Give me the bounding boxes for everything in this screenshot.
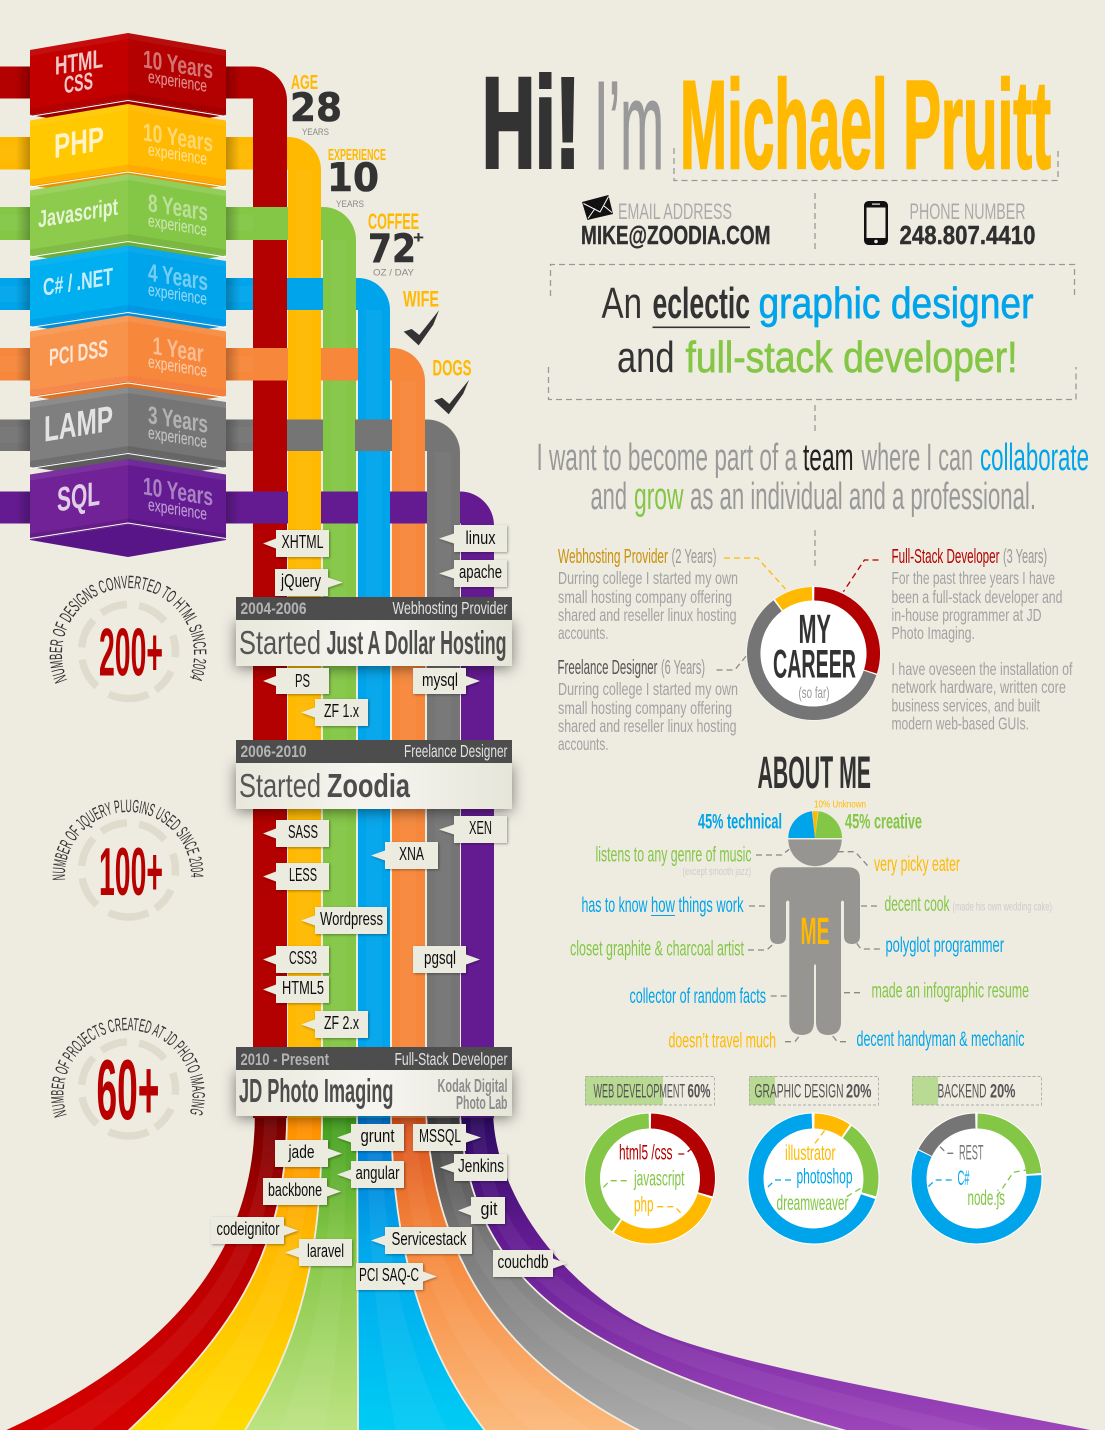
about me annotations: collector of random facts (630, 985, 766, 1008)
about me annotations: doesn’t travel much (668, 1030, 776, 1052)
tag: Jenkins (440, 1154, 507, 1181)
career: freelance designer (558, 655, 747, 754)
skill bar: web development (585, 1076, 714, 1105)
donut: graphic design (748, 1112, 880, 1244)
career: webhosting provider: shared and reseller linux hosting (558, 605, 736, 625)
contact: email (581, 195, 770, 250)
objective statement (536, 437, 1089, 518)
tag: XNA (371, 842, 438, 869)
career: full-stack developer: Photo Imaging. (892, 623, 975, 643)
contact: phone (864, 199, 1036, 250)
rainbow fan of skill bands (0, 1115, 1105, 1430)
objective statement: I want to become part of a (536, 437, 798, 479)
contact: phone: PHONE NUMBER (910, 199, 1026, 224)
timeline panel: 2004-2006: Just A Dollar Hosting (326, 624, 506, 661)
about me annotations: decent cook (884, 893, 950, 916)
tag: CSS3: CSS3 (289, 948, 317, 968)
title: Hi! (482, 52, 580, 195)
skill bar: graphic design: GRAPHIC DESIGN (754, 1082, 844, 1102)
stat: coffee (368, 209, 424, 278)
tag: PS (263, 668, 329, 694)
career: webhosting provider: Webhosting Provider (558, 546, 668, 568)
tag: codeignitor: codeignitor (216, 1219, 280, 1239)
person figure with pie head (770, 811, 860, 1035)
tag: pgsql (413, 946, 480, 973)
donut: graphic design: dreamweaver (776, 1192, 848, 1215)
donut: web development: php (634, 1194, 654, 1216)
stat: age (290, 72, 342, 138)
skill block: C# / .NET: 4 Years (148, 259, 208, 296)
tag: apache (439, 560, 507, 587)
tag: git: git (480, 1199, 498, 1219)
donut: web development: html5 /css (619, 1142, 672, 1164)
tag: backbone: backbone (268, 1180, 322, 1200)
career: freelance designer: small hosting company offering (558, 698, 732, 718)
timeline panel: 2010-present: Photo Lab (456, 1093, 508, 1113)
stat: experience: EXPERIENCE (328, 147, 386, 164)
donut: backend (910, 1112, 1042, 1244)
skill block: PCI DSS: PCI DSS (49, 335, 108, 372)
tag: HTML5 (263, 976, 329, 1003)
about me annotations: listens to any genre of music (596, 844, 752, 866)
tag: CSS3 (263, 946, 329, 973)
career: freelance designer: (6 Years) (661, 657, 705, 679)
tag: XHTML (263, 530, 329, 557)
skill block: PHP (30, 104, 226, 200)
timeline panel: 2010-present (236, 1047, 512, 1116)
circular stat: designs converted: 200+ (99, 614, 163, 690)
skill block: C# / .NET: experience (148, 280, 207, 309)
donut: my career: MY (798, 606, 831, 652)
circular stat: jquery plugins (52, 800, 204, 921)
career: webhosting provider (558, 546, 786, 643)
tag: SASS (263, 820, 329, 847)
donut: my career: (so far) (798, 685, 830, 702)
tagline box: full-stack developer! (686, 333, 1018, 382)
stat: wife check: WIFE (403, 286, 439, 312)
career: freelance designer: Durring college I started my own (558, 679, 738, 699)
stat: coffee: 72 (368, 227, 416, 272)
donut: backend: REST (959, 1142, 984, 1164)
career: freelance designer: accounts. (558, 734, 608, 754)
donut: graphic design: photoshop (796, 1166, 852, 1188)
skill bar: backend (912, 1076, 1042, 1105)
skill block: Javascript: experience (148, 211, 207, 240)
career: full-stack developer: Full-Stack Developer (892, 546, 1000, 568)
about me annotations: closet graphite & charcoal artist (570, 938, 744, 960)
about me annotations: 10% Unknown (814, 800, 866, 810)
skill block: PHP: PHP (54, 120, 104, 166)
stat: wife check (403, 286, 439, 345)
tag: ZF 2.x: ZF 2.x (324, 1013, 359, 1033)
timeline panel: 2006-2010 (236, 740, 512, 809)
career: freelance designer: shared and reseller linux hosting (558, 716, 736, 736)
objective statement: and (590, 476, 627, 518)
career: webhosting provider: small hosting company offering (558, 587, 732, 607)
about me annotations: (except smooth jazz) (682, 866, 751, 878)
circular stat: jquery plugins: 100+ (99, 834, 163, 910)
career: full-stack developer: (3 Years) (1003, 546, 1047, 568)
circular stat: jquery plugins: NUMBER OF JQUERY PLUGINS USED SINCE 2004 (52, 800, 204, 880)
timeline panel: 2010-present: JD Photo Imaging (239, 1072, 394, 1109)
tag: apache: apache (459, 562, 502, 582)
skill block: HTML CSS: CSS (64, 68, 93, 99)
career: full-stack developer: business services, and built (892, 696, 1040, 716)
skill block: SQL: 10 Years (143, 472, 213, 512)
objective statement: where I can (861, 437, 973, 479)
tag: laravel: laravel (307, 1241, 344, 1261)
objective statement: team (803, 437, 854, 479)
stat: coffee: + (413, 228, 424, 247)
tagline box: graphic designer (758, 279, 1034, 328)
timeline panel: 2006-2010: Started (239, 767, 321, 804)
tag: PS: PS (295, 671, 310, 691)
tag: Wordpress: Wordpress (320, 909, 383, 929)
circular stat: projects created: 60+ (96, 1043, 160, 1138)
skill bar: backend: 20% (990, 1082, 1016, 1102)
skill block: SQL (30, 459, 226, 557)
tag: HTML5: HTML5 (282, 978, 324, 998)
skill bar: backend: BACKEND (938, 1082, 986, 1102)
skill block: PHP: 10 Years (143, 118, 213, 158)
tag: Wordpress (301, 907, 387, 934)
tag: ZF 2.x (301, 1011, 368, 1038)
tag: MSSQL: MSSQL (419, 1126, 461, 1146)
career: webhosting provider: Durring college I started my own (558, 568, 738, 588)
tag: XHTML: XHTML (282, 532, 324, 552)
infographic canvas: ABOUT ME (758, 747, 871, 798)
skill block: LAMP: 3 Years (148, 401, 208, 439)
tag: grunt (337, 1124, 404, 1151)
skill block: PCI DSS: experience (148, 352, 207, 381)
circular stat: designs converted: NUMBER OF DESIGNS CONVERTED TO HTML SINCE 2004 (50, 576, 206, 684)
tag: XEN (439, 816, 507, 843)
tag: mysql (413, 668, 480, 694)
tag: Servicestack (371, 1227, 472, 1254)
circular stat: projects created: NUMBER OF PROJECTS CREATED AT JD PHOTO IMAGING (51, 1018, 205, 1118)
about me annotations: 45% creative (845, 810, 922, 834)
stat: coffee: COFFEE (368, 209, 419, 234)
objective statement: grow (634, 476, 684, 518)
career: webhosting provider: accounts. (558, 623, 608, 643)
donut: web development: javascript (633, 1168, 685, 1190)
skill block: LAMP (30, 387, 226, 482)
tag: PCI SAQ-C: PCI SAQ-C (359, 1265, 419, 1285)
timeline panel: 2004-2006 (236, 597, 512, 666)
skill block: Javascript (30, 174, 226, 271)
about me annotations: has to know (582, 894, 648, 917)
tag: XNA: XNA (399, 844, 424, 864)
skill block: PCI DSS (30, 316, 226, 411)
timeline panel: 2004-2006: 2004-2006 (240, 599, 306, 618)
tag: Jenkins: Jenkins (458, 1156, 504, 1176)
skill bar: graphic design: 20% (846, 1082, 872, 1102)
tag: jade (275, 1140, 342, 1167)
timeline panel: 2006-2010: Freelance Designer (404, 741, 508, 761)
timeline panel: 2010-present: Full-Stack Developer (394, 1049, 508, 1069)
tag: codeignitor (211, 1217, 298, 1244)
career: full-stack developer (843, 546, 1073, 734)
skill block: Javascript: Javascript (38, 194, 118, 234)
skill block: Javascript: 8 Years (148, 189, 208, 227)
tag: LESS (263, 863, 329, 890)
career: webhosting provider: (2 Years) (672, 546, 716, 568)
donut: backend: C# (958, 1167, 970, 1190)
about me annotations: things work (678, 894, 744, 917)
timeline panel: 2010-present: Kodak Digital (438, 1076, 508, 1096)
tag: laravel (285, 1239, 352, 1266)
tagline box: and (617, 333, 674, 382)
skill block: C# / .NET (30, 246, 226, 341)
skill block: SQL: experience (148, 495, 207, 524)
tag: MSSQL (413, 1124, 481, 1151)
woven skill bands (0, 66, 494, 1118)
tag: ZF 1.x (301, 699, 368, 726)
skill bar: graphic design (749, 1076, 878, 1105)
skill block: PHP: experience (148, 140, 207, 169)
person figure with pie head: ME (800, 911, 830, 953)
about me annotations: 45% technical (698, 810, 782, 834)
contact: email: EMAIL ADDRESS (618, 199, 732, 224)
donut: backend: node.js (968, 1187, 1005, 1210)
icon: phone (864, 201, 888, 245)
skill bar: web development: 60% (688, 1082, 711, 1102)
skill block: SQL: SQL (57, 475, 100, 519)
skill block: C# / .NET: C# / .NET (43, 263, 113, 302)
timeline panel: 2004-2006: Webhosting Provider (392, 598, 508, 618)
about me annotations: polyglot programmer (886, 934, 1004, 957)
tag: linux (439, 525, 507, 552)
skill block: HTML CSS: experience (148, 67, 207, 96)
skill block: HTML CSS: HTML (55, 43, 103, 81)
tag: XEN: XEN (469, 818, 492, 838)
about me annotations (570, 800, 1052, 1052)
tag: angular: angular (356, 1163, 400, 1183)
stat: age: YEARS (302, 127, 329, 138)
skill block: LAMP: LAMP (44, 398, 113, 450)
tag: couchdb (493, 1250, 567, 1277)
tag: mysql: mysql (422, 670, 458, 690)
tag: ZF 1.x: ZF 1.x (324, 701, 359, 721)
donut: my career (746, 586, 880, 720)
stat: dogs check (432, 356, 472, 414)
tag: pgsql: pgsql (424, 948, 456, 968)
stat: experience: 10 (327, 156, 379, 201)
tag: LESS: LESS (289, 865, 317, 885)
donut: web development (584, 1112, 716, 1244)
stat: coffee: OZ / DAY (373, 268, 415, 278)
tag: jQuery (275, 569, 343, 596)
stat: age: AGE (291, 72, 318, 94)
tag: backbone (263, 1178, 341, 1205)
skill block: PCI DSS: 1 Year (152, 332, 204, 368)
tag: PCI SAQ-C (356, 1263, 437, 1290)
tag: grunt: grunt (360, 1126, 394, 1146)
about me annotations: very picky eater (874, 853, 960, 876)
stat: age: 28 (290, 86, 342, 131)
timeline panel: 2004-2006: Started (239, 624, 321, 661)
title: I’m (594, 55, 664, 196)
tag: linux: linux (466, 528, 496, 548)
stat: experience (327, 147, 386, 210)
skill block: HTML CSS: 10 Years (143, 45, 213, 85)
tag: git (458, 1197, 505, 1224)
skill block: LAMP: experience (148, 423, 207, 452)
stat: experience: YEARS (336, 199, 364, 210)
timeline panel: 2010-present: 2010 - Present (240, 1050, 329, 1069)
donut: my career: CAREER (773, 642, 856, 686)
career: full-stack developer: in-house programmer at JD (892, 605, 1042, 625)
contact: phone: 248.807.4410 (900, 220, 1036, 250)
tagline box: eclectic (652, 279, 750, 328)
stat: dogs check: DOGS (432, 356, 472, 381)
timeline panel: 2006-2010: Zoodia (327, 767, 410, 804)
tag: SASS: SASS (288, 822, 318, 842)
donut: graphic design: illustrator (785, 1142, 836, 1165)
skill block: HTML CSS (30, 33, 226, 132)
career: full-stack developer: modern web-based GUIs. (892, 714, 1029, 734)
tagline box (548, 264, 1076, 400)
tag: jQuery: jQuery (280, 571, 321, 591)
tagline box: An (602, 279, 642, 328)
tag: jade: jade (288, 1142, 314, 1162)
contact: email: MIKE@ZOODIA.COM (581, 220, 770, 250)
timeline panel: 2006-2010: 2006-2010 (240, 742, 306, 761)
tag: angular (337, 1161, 404, 1188)
career: freelance designer: Freelance Designer (558, 657, 658, 679)
tag: Servicestack: Servicestack (392, 1229, 467, 1249)
title (482, 52, 1058, 196)
tag: couchdb: couchdb (498, 1252, 548, 1272)
about me annotations: how (651, 894, 676, 917)
icon: envelope (582, 195, 613, 220)
skill bar: web development: WEB DEVELOPMENT (594, 1082, 685, 1102)
